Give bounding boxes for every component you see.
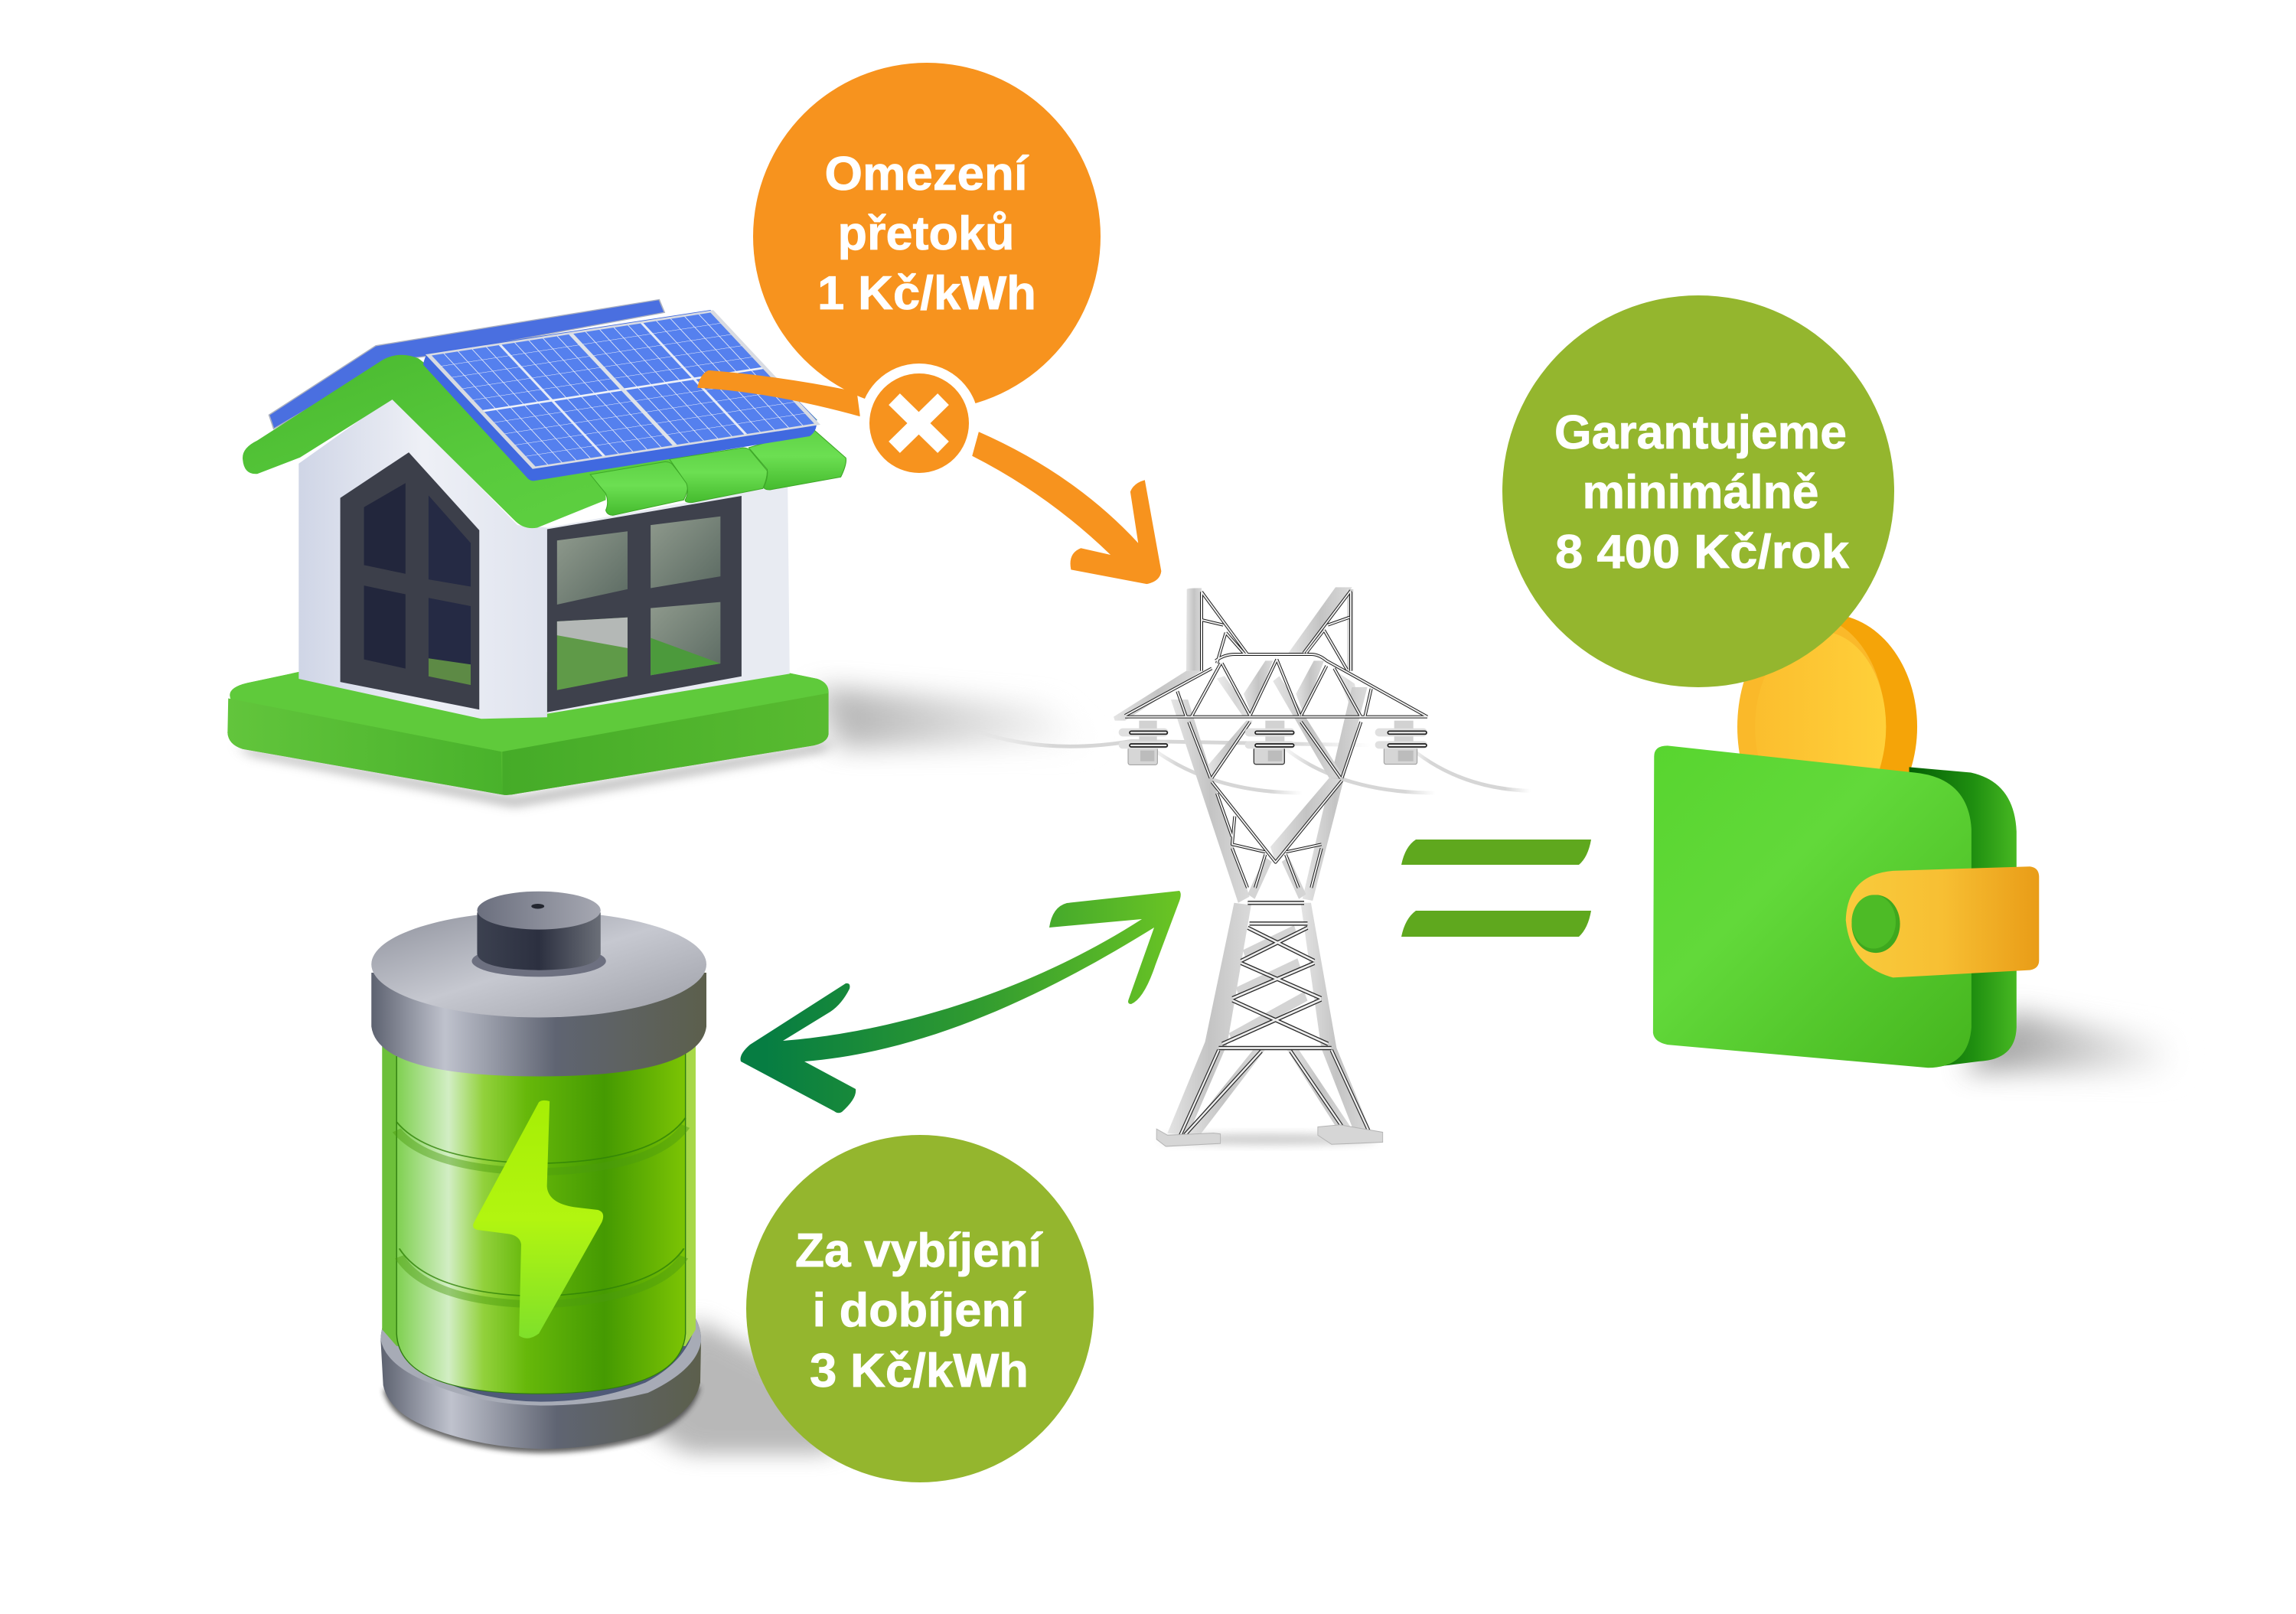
arrow: two-way green arrow between battery and grid — [741, 891, 1181, 1113]
callout text: Garantujeme minimálně 8 400 Kč/rok: Garantujeme — [1554, 406, 1847, 459]
callout text: Za vybíjení i dobíjení 3 Kč/kWh: Za vybíjení — [795, 1224, 1043, 1277]
illustration: wallet with coin — [1653, 614, 2177, 1073]
shadow: house — [237, 686, 1088, 807]
battery base ring — [380, 1318, 701, 1453]
house walls — [298, 397, 790, 719]
back roof — [269, 300, 664, 429]
green roof — [243, 315, 817, 528]
roof tile 2 — [670, 448, 767, 503]
callout text: Garantujeme minimálně 8 400 Kč/rok: 8 400 Kč/rok — [1555, 526, 1850, 579]
wires — [974, 731, 1531, 793]
wallet strap — [1846, 866, 2039, 977]
callout text: Omezení přetoků 1 Kč/kWh — [817, 148, 1036, 320]
callout: battery price — [746, 1135, 1094, 1482]
solar panel — [429, 311, 817, 468]
callout text: Omezení přetoků 1 Kč/kWh: přetoků — [837, 207, 1015, 260]
roof tile 1 — [590, 461, 688, 515]
house base — [227, 672, 829, 795]
wallet shadow — [1963, 1012, 2177, 1073]
wallet back — [1910, 767, 2017, 1067]
pylon upper structure — [1114, 587, 1427, 888]
illustration: solar house — [227, 300, 829, 795]
pylon lower structure — [1156, 687, 1383, 1146]
icon: blocked flow X — [859, 364, 979, 483]
illustration: battery — [371, 892, 859, 1454]
callout text: Za vybíjení i dobíjení 3 Kč/kWh: 3 Kč/kWh — [810, 1345, 1029, 1397]
lightning bolt — [473, 1100, 603, 1338]
wallet button — [1851, 895, 1900, 953]
callout text: Garantujeme minimálně 8 400 Kč/rok — [1554, 406, 1850, 579]
wallet front — [1653, 745, 1971, 1068]
coin — [1737, 614, 1917, 840]
right window — [547, 496, 742, 712]
roof tile 3 — [748, 429, 846, 490]
callout text: Garantujeme minimálně 8 400 Kč/rok: minimálně — [1583, 466, 1818, 519]
panel base — [423, 310, 817, 481]
callout text: Omezení přetoků 1 Kč/kWh: 1 Kč/kWh — [817, 267, 1036, 320]
battery cap — [371, 892, 706, 1076]
battery body — [382, 1031, 696, 1394]
illustration: power pylon — [974, 587, 1531, 1146]
left window — [341, 452, 479, 709]
callout text: Za vybíjení i dobíjení 3 Kč/kWh: i dobíjení — [813, 1284, 1026, 1337]
callout: minimum guarantee — [1502, 295, 1894, 687]
callout text: Omezení přetoků 1 Kč/kWh: Omezení — [825, 148, 1029, 201]
callout text: Za vybíjení i dobíjení 3 Kč/kWh — [795, 1224, 1043, 1397]
callout: orange circle — [753, 63, 1101, 410]
roof tiles and solar panel base — [423, 310, 846, 515]
equals sign — [1401, 840, 1591, 937]
insulators — [1119, 721, 1427, 765]
arrow: orange flow from house to grid — [697, 370, 1161, 584]
battery shadow — [644, 1317, 859, 1454]
